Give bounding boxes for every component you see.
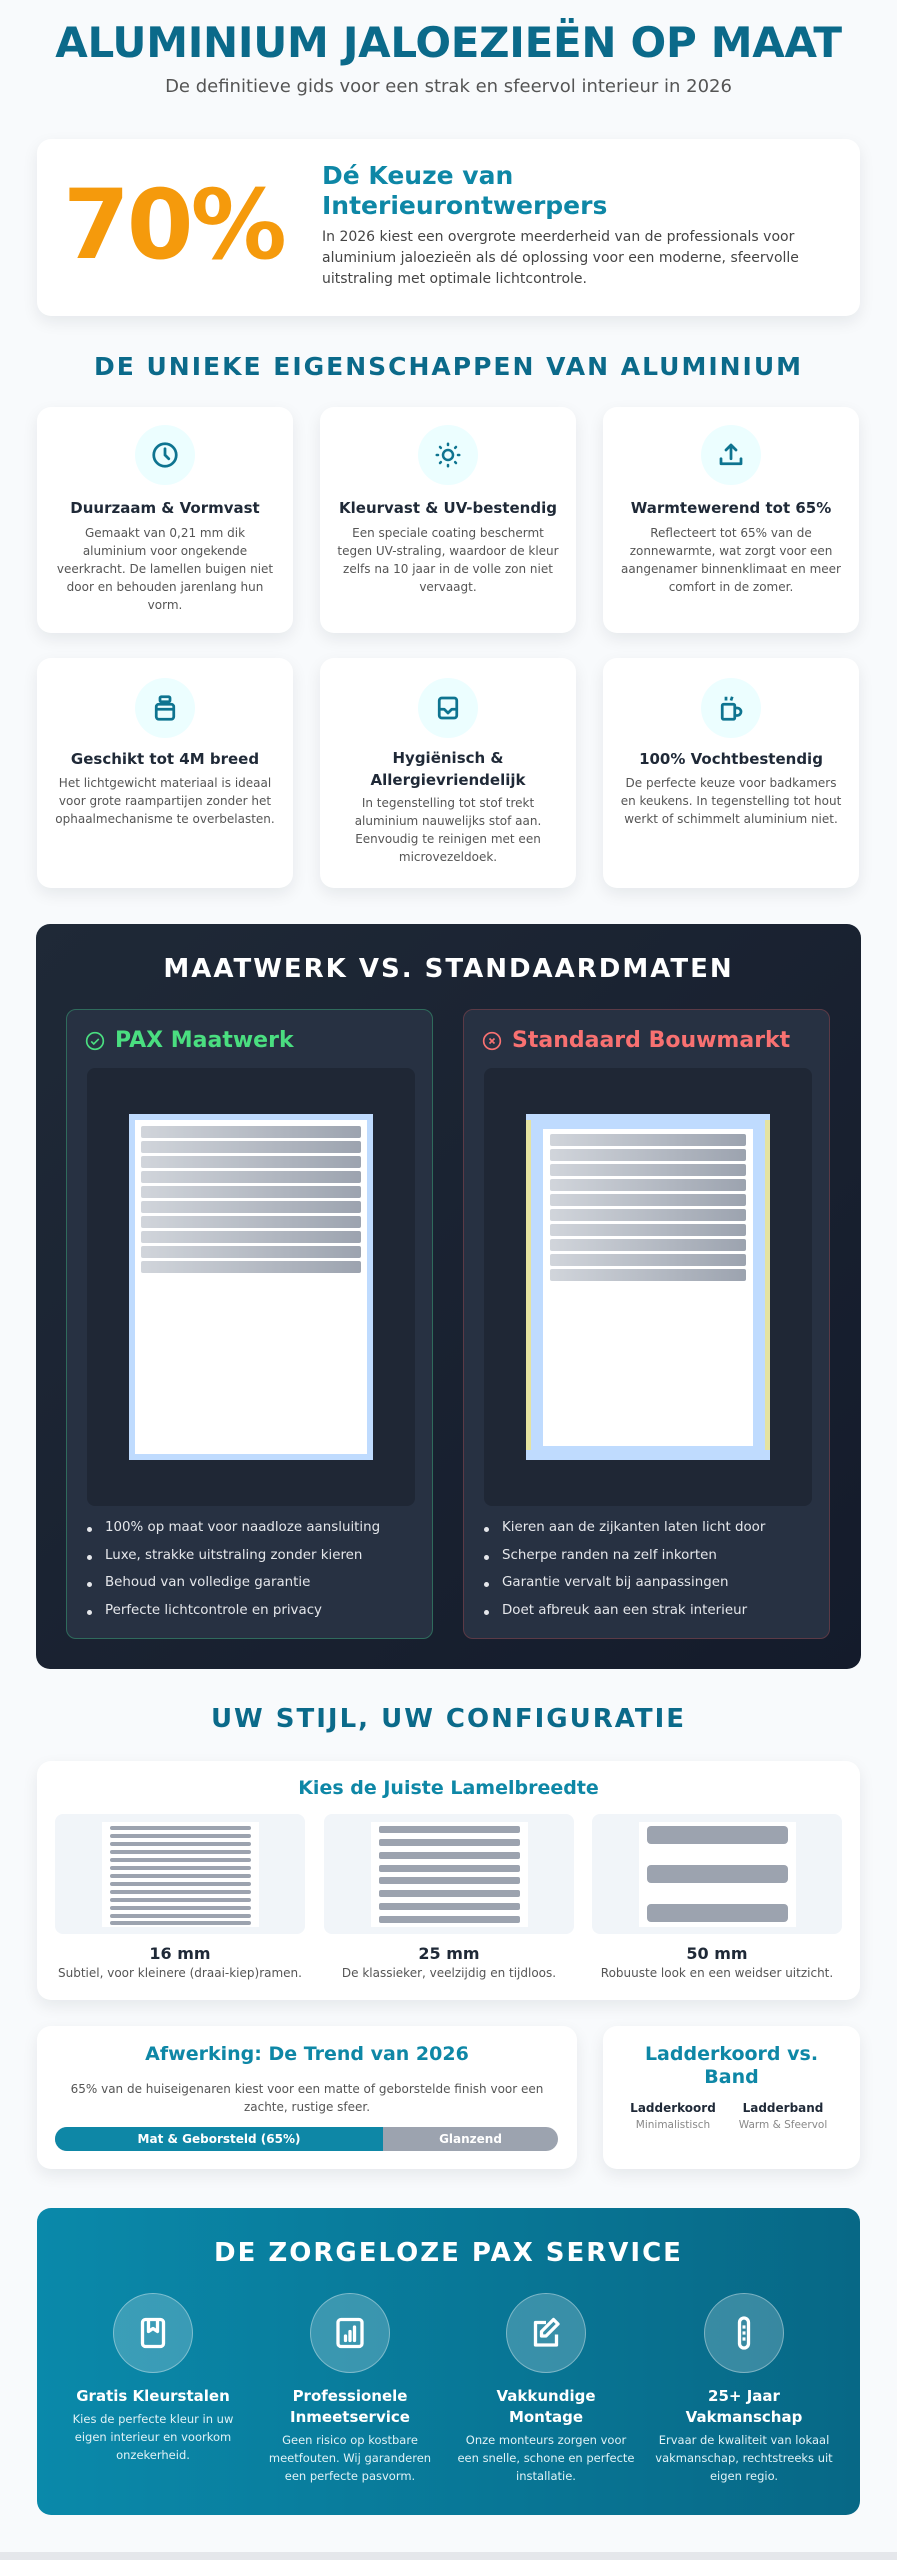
service: montage xyxy=(457,2293,635,2483)
window illustration xyxy=(87,1068,415,1506)
panel: service: Geen risico op kostbare meetfouten. Wij garanderen een perfecte pasvorm. xyxy=(269,2433,431,2483)
labels: lamel widths: 50 mm xyxy=(686,1944,748,1963)
bullet list: 100% op maat voor naadloze aansluiting xyxy=(105,1520,380,1535)
bullet list: Scherpe randen na zelf inkorten xyxy=(502,1548,717,1562)
icon: upload xyxy=(701,425,761,485)
panel: service xyxy=(37,2208,860,2515)
card: ladderkoord: Minimalistisch xyxy=(636,2119,710,2131)
bullet list xyxy=(484,1520,766,1618)
icon: tray xyxy=(418,678,478,738)
feature card: warmtewerend xyxy=(603,407,859,633)
card: ladderkoord xyxy=(603,2026,860,2169)
heading: Band xyxy=(704,2066,759,2088)
feature card: vocht: De perfecte keuze voor badkamers en keukens. In tegenstelling tot hout werkt of schimmelt aluminium niet. xyxy=(621,776,841,826)
feature card: breed: Het lichtgewicht materiaal is ideaal voor grote raampartijen zonder het ophaalmechanisme te overbelasten. xyxy=(55,776,275,826)
icon: tool xyxy=(704,2293,784,2373)
stat text: In 2026 kiest een overgrote meerderheid van de professionals voor aluminium jaloezieën als dé oplossing voor een moderne, sfeervolle uitstraling met optimale lichtcontrole. xyxy=(322,229,799,287)
feature card: vocht: 100% Vochtbestendig xyxy=(639,750,823,768)
stat heading: Dé Keuze van xyxy=(322,161,513,190)
feature card: kleurvast: Kleurvast & UV-bestendig xyxy=(339,499,557,517)
service: kleurstalen xyxy=(73,2293,233,2462)
bullet list: Luxe, strakke uitstraling zonder kieren xyxy=(105,1548,362,1562)
window illustration xyxy=(484,1068,812,1506)
feature card: hygienisch xyxy=(320,658,576,888)
bar chart: Glanzend xyxy=(439,2132,502,2146)
option: 25mm xyxy=(324,1814,574,1934)
bullet list: Kieren aan de zijkanten laten licht door xyxy=(502,1520,765,1535)
feature card: hygienisch: Hygiënisch & xyxy=(392,749,504,767)
card: lamelbreedte xyxy=(37,1761,860,2000)
labels: lamel widths: Subtiel, voor kleinere (draai-kiep)ramen. xyxy=(58,1966,302,1980)
bullet list xyxy=(87,1520,380,1618)
heading: eigenschappen: DE UNIEKE EIGENSCHAPPEN VAN ALUMINIUM xyxy=(94,352,803,381)
panel: service: 25+ Jaar xyxy=(708,2387,780,2405)
icon: mug xyxy=(701,678,761,738)
service: vakmanschap xyxy=(655,2293,833,2483)
icon: sun xyxy=(418,425,478,485)
heading: PAX Maatwerk xyxy=(115,1028,294,1053)
panel: service: Professionele xyxy=(293,2387,407,2405)
card: afwerking xyxy=(37,2026,577,2169)
icon: clock xyxy=(135,425,195,485)
panel: service: Vakkundige xyxy=(496,2387,596,2405)
card: ladderkoord: Warm & Sfeervol xyxy=(739,2119,827,2131)
bullet list: Behoud van volledige garantie xyxy=(105,1575,310,1590)
panel: PAX maatwerk xyxy=(66,1009,433,1639)
feature card: warmtewerend: Reflecteert tot 65% van de zonnewarmte, wat zorgt voor een aangenamer binnenklimaat en meer comfort in de zomer. xyxy=(621,526,841,594)
option: 16mm xyxy=(55,1814,305,1934)
bullet list: Garantie vervalt bij aanpassingen xyxy=(502,1575,728,1590)
icon: bookmark xyxy=(113,2293,193,2373)
panel: service: Onze monteurs zorgen voor een snelle, schone en perfecte installatie. xyxy=(457,2433,635,2483)
labels: lamel widths: De klassieker, veelzijdig en tijdloos. xyxy=(342,1966,556,1980)
option: 50mm xyxy=(592,1814,842,1934)
feature card: kleurvast: Een speciale coating beschermt tegen UV-straling, waardoor de kleur zelfs na 10 jaar in de volle zon niet vervaagt. xyxy=(337,526,559,594)
feature card: hygienisch: Allergievriendelijk xyxy=(370,771,526,789)
feature card: duurzaam: Gemaakt van 0,21 mm dik aluminium voor ongekende veerkracht. De lamellen buigen niet door en behouden jarenlang hun vorm. xyxy=(57,526,273,612)
feature card: hygienisch: In tegenstelling tot stof trekt aluminium nauwelijks stof aan. Eenvoudig te reinigen met een microvezeldoek. xyxy=(355,796,541,864)
labels: lamel widths: 16 mm xyxy=(149,1944,211,1963)
feature card: warmtewerend: Warmtewerend tot 65% xyxy=(631,499,831,517)
icon: jar xyxy=(135,678,195,738)
panel: service: Montage xyxy=(509,2408,583,2426)
stat card xyxy=(37,139,860,316)
panel: service: Gratis Kleurstalen xyxy=(76,2387,230,2405)
heading: Standaard Bouwmarkt xyxy=(512,1028,790,1053)
feature card: duurzaam xyxy=(37,407,293,633)
dark heading: MAATWERK VS. STANDAARDMATEN xyxy=(163,954,734,984)
big stat: 70% xyxy=(63,169,284,281)
subtitle: De definitieve gids voor een strak en sfeervol interieur in 2026 xyxy=(165,76,732,97)
panel: maatwerk vs standaard xyxy=(36,924,861,1669)
labels: lamel widths: 25 mm xyxy=(418,1944,480,1963)
panel: service: Inmeetservice xyxy=(290,2408,410,2426)
heading: DE ZORGELOZE PAX SERVICE xyxy=(214,2238,683,2268)
heading: configuratie: UW STIJL, UW CONFIGURATIE xyxy=(211,1704,686,1734)
title: ALUMINIUM JALOEZIEËN OP MAAT xyxy=(55,18,842,67)
panel: service: Vakmanschap xyxy=(686,2408,802,2426)
feature card: kleurvast xyxy=(320,407,576,633)
comparison: Ladderkoord xyxy=(630,2101,716,2115)
service: inmeet xyxy=(269,2293,431,2483)
bar chart xyxy=(55,2127,558,2151)
heading: Ladderkoord vs. xyxy=(645,2043,818,2065)
bullet list: Doet afbreuk aan een strak interieur xyxy=(502,1602,747,1618)
feature card: breed: Geschikt tot 4M breed xyxy=(71,750,259,768)
icon: chart xyxy=(310,2293,390,2373)
panel: standaard bouwmarkt xyxy=(463,1009,830,1639)
feature card: duurzaam: Duurzaam & Vormvast xyxy=(70,499,260,517)
bar chart: Mat & Geborsteld (65%) xyxy=(138,2132,300,2146)
panel: service: Ervaar de kwaliteit van lokaal vakmanschap, rechtstreeks uit eigen regio. xyxy=(655,2433,833,2483)
heading: Afwerking: De Trend van 2026 xyxy=(145,2043,469,2065)
heading xyxy=(645,2043,818,2088)
feature card: vocht xyxy=(603,658,859,888)
panel: service: Kies de perfecte kleur in uw eigen interieur en voorkom onzekerheid. xyxy=(73,2412,233,2462)
labels: lamel widths xyxy=(58,1944,833,1980)
text: 65% van de huiseigenaren kiest voor een matte of geborstelde finish voor een zachte, rustige sfeer. xyxy=(71,2082,543,2114)
bullet list: Perfecte lichtcontrole en privacy xyxy=(105,1602,322,1618)
stat heading: Interieurontwerpers xyxy=(322,191,607,220)
card: ladderkoord: Ladderband xyxy=(743,2101,823,2115)
labels: lamel widths: Robuuste look en een weidser uitzicht. xyxy=(601,1966,833,1980)
card heading: Kies de Juiste Lamelbreedte xyxy=(298,1777,599,1799)
feature card: breed xyxy=(37,658,293,888)
icon: edit xyxy=(506,2293,586,2373)
stat heading xyxy=(322,161,607,220)
